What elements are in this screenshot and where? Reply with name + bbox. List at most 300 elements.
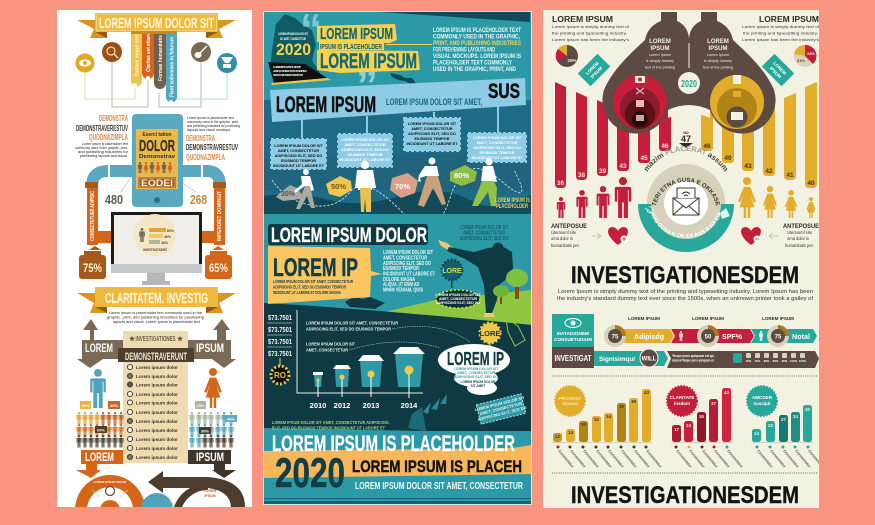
- header yellow title: [317, 24, 432, 73]
- badge: amcoer: [747, 386, 777, 416]
- row labels: LOREM IPSUM: [628, 316, 660, 321]
- heart plus: [608, 227, 628, 245]
- yellow bar labels: [703, 143, 815, 187]
- vertical tabs: Formas humanitatis: [158, 35, 164, 81]
- binocular label right: Lorem Ipsum: [707, 53, 729, 57]
- right anteposue text: humanitatis per: [785, 243, 813, 248]
- binoculars: [602, 12, 776, 134]
- binocular label right: text of the printing: [703, 66, 733, 70]
- pie chart left: [556, 45, 578, 67]
- header paragraph: USED IN THE GRAPHIC, PRINT, AND: [433, 66, 516, 73]
- right column and pointing hand: IMPERDIET DOMINGIT: [217, 191, 223, 241]
- text block: left headings: previewing layouts and visual.: [80, 154, 128, 158]
- text block: right headings: and publishing industries for previewing: [187, 124, 240, 128]
- white paragraph: ADIPISCING ELIT, SED DO: [383, 261, 431, 267]
- arrow left: [592, 233, 601, 239]
- white paragraph: ALIQUA, UT ENIM AD: [383, 282, 419, 288]
- callout bubble 3: LOREM IPSUM DOLOR SIT: [408, 122, 457, 126]
- right anteposue text: [783, 224, 819, 248]
- banner: lorem ipsum sus: SUS: [488, 80, 520, 103]
- figure: 70% walker: 70%: [395, 184, 411, 191]
- red bar labels: 45: [640, 155, 648, 162]
- bar chart: yellow: 12: [555, 434, 560, 439]
- arrow band one: 50: [705, 334, 712, 340]
- text block: left headings: and publishing industries for: [78, 150, 129, 154]
- teal top-right text: ADIPISCING ELIT, SED DO: [460, 236, 509, 242]
- bar chart: yellow: 43: [644, 390, 649, 395]
- black burst callout: AMET, CONSECTETUR: [439, 297, 478, 301]
- header 2020 blob: LOREM IPSUM DOLOR SIT: [273, 65, 301, 69]
- right heading text: [742, 15, 820, 42]
- yellow people row: [738, 177, 816, 218]
- right anteposue text: orna dolor in: [787, 236, 809, 241]
- bar chart: red: 37: [711, 401, 716, 406]
- stat 268: 268: [190, 192, 207, 207]
- people grid: left: [76, 401, 124, 448]
- right brown arrows with IPSUM: [188, 319, 236, 368]
- yellow bar labels: 43: [744, 163, 752, 170]
- text block: left headings: Lorem Ipsum is placeholder text: [82, 142, 128, 146]
- white paragraph: EIUSMOD TEMPOR: [383, 266, 419, 272]
- dark blue walking scene background: [263, 100, 532, 214]
- brown curved arrow wheel: IPSUM: [204, 494, 216, 498]
- chart y labels: [267, 313, 292, 358]
- phone: Exerci tation: [142, 132, 172, 138]
- badge: 75%: 75%: [83, 261, 102, 275]
- blue half circle: [141, 493, 173, 507]
- bar chart: red: 17: [674, 427, 679, 432]
- text block: right headings: commonly used in the graphic, print,: [187, 120, 239, 124]
- panel: beige checklist: [118, 331, 194, 463]
- red bar labels: 39: [599, 168, 606, 175]
- orange wheel: [75, 475, 145, 510]
- header paragraph: LOREM IPSUM IS PLACEHOLDER TEXT: [433, 27, 521, 34]
- banner caption: graphic, print, and publishing industries for previewing: [107, 316, 204, 320]
- arrow band two: 60%: [764, 359, 770, 363]
- dark IPSUM label arrow: IPSUM: [196, 450, 224, 464]
- vertical tabs: Fiant sollemnes in futurum: [170, 37, 176, 97]
- bar chart: yellow: 30: [619, 404, 624, 409]
- right heading text: Lorem Ipsum is simply dummy text of: [742, 25, 820, 29]
- rotated axis labels: [557, 449, 825, 469]
- red people row: [557, 177, 631, 218]
- teal info block: [552, 314, 594, 347]
- callout bubble 1: ADIPISCING ELIT, SED DO: [275, 154, 322, 158]
- 2020 circle: 2020: [681, 79, 697, 90]
- light band backdrop: [263, 150, 532, 190]
- pie chart right: [794, 45, 816, 67]
- cloud: lorem ip: SIT AMET: [471, 384, 485, 388]
- brown curved arrow wheel: [148, 471, 245, 507]
- people grid: left: 40%: [110, 403, 118, 408]
- LORE yellow burst: LORE: [480, 329, 500, 338]
- red bar labels: [557, 143, 669, 187]
- badge: claritate: CLARITATE: [670, 395, 694, 400]
- cup chart: 2013: [358, 355, 384, 410]
- cup chart: 2013: 2013: [363, 401, 379, 410]
- red bar labels: 38: [578, 172, 585, 179]
- stat 480: 480: [105, 192, 123, 207]
- black burst callout: [436, 290, 481, 308]
- panel: beige checklist: Lorem ipsum dolor: [136, 374, 178, 379]
- callout bubble 3: ADIPISCING ELIT, SED DO: [408, 132, 456, 136]
- phone: Demonstrav: [139, 154, 175, 160]
- badge: process: dynami: [562, 401, 578, 406]
- badge: 65%: 65%: [209, 261, 228, 275]
- teal top-right text: LOREM IPSUM DOLOR SIT: [460, 225, 508, 231]
- yellow speech box: INCIDIDUNT UT LABORE ET DOLORE MAGNA: [273, 290, 341, 295]
- rotated axis labels: Consectetur: [701, 449, 719, 469]
- chevrons: [423, 394, 447, 414]
- orange LOREM label arrow: [76, 450, 123, 478]
- rotated axis labels: Consectetur: [633, 449, 651, 469]
- header 2020 blob: SIT AMET, CONSECTETUR: [280, 37, 306, 41]
- arrow band two: 40%: [755, 359, 761, 363]
- black burst callout: LOREM IPSUM DOLOR SIT: [436, 293, 481, 297]
- cup chart: 2010: 2010: [310, 401, 326, 410]
- banner caption: Lorem Ipsum is placeholder text commonly used in the: [109, 311, 202, 315]
- icon: orange woman: [204, 368, 222, 408]
- stat 268: [178, 180, 207, 207]
- arrow band two: *Neque porro quisquam est qui: [672, 354, 714, 358]
- chart captions: LOREM IPSUM DOLOR SIT: [306, 342, 355, 346]
- arrow band one: [604, 325, 817, 347]
- chart y labels: $73.7501: [268, 313, 292, 322]
- cloud: lorem ip: ADIPISCING ELIT, SED DO: [454, 375, 498, 379]
- teal chevron large: [408, 407, 426, 431]
- rotated axis labels: Consectetur: [620, 449, 638, 469]
- arrow band two: 100%: [790, 359, 798, 363]
- figure: 80% walker: [450, 158, 497, 206]
- vertical tabs: [131, 31, 177, 104]
- figure: 50% walker: 50%: [331, 184, 347, 191]
- text block: left headings: commonly used in the graphic, print,: [75, 146, 128, 150]
- icon: guitar circle: [191, 42, 211, 62]
- left heading text: [552, 15, 630, 42]
- curved heading: mazim PLACERAT assum: [644, 146, 728, 172]
- badge: process: PROCESS: [559, 396, 581, 401]
- chart captions: AMET, CONSECTETUR: [306, 348, 349, 352]
- red bar labels: 46: [661, 143, 669, 150]
- panel: beige checklist: Lorem ipsum dolor: [136, 446, 178, 451]
- arrow band two: dolorem*Neque porro quisquam es: [672, 358, 714, 362]
- small yellow caption: PLACEHOLDER: [496, 204, 528, 210]
- binocular label left: is simply dummy: [646, 59, 674, 63]
- arrow band two: [594, 349, 819, 368]
- arrow band one: Notal: [792, 334, 810, 341]
- rotated axis labels: Consectetur: [782, 449, 800, 469]
- cloud: lorem ip: LOREM IPSUM DOLOR: [461, 380, 496, 384]
- panel: beige checklist: Lorem ipsum dolor: [136, 419, 178, 424]
- white paragraph: INCIDIDUNT UT LABORE ET: [383, 272, 436, 278]
- heart minus: [741, 227, 761, 245]
- bar chart: red: 30: [699, 414, 704, 419]
- rotated axis labels: Consectetur: [756, 449, 774, 469]
- red bar labels: 43: [619, 163, 627, 170]
- panel: beige checklist: Lorem ipsum dolor: [136, 410, 178, 415]
- right anteposue text: Uterarumf site: [787, 230, 812, 235]
- left column and pointing hand: CONSECTETUER ADIPISIC: [90, 191, 96, 241]
- teal half ring: [638, 204, 734, 252]
- people grid: left: 60%: [97, 428, 105, 432]
- pie chart left: 25%: [567, 58, 577, 63]
- callout bubble 3: INCIDIDUNT UT LABORE ET: [406, 142, 458, 146]
- stat 480: [105, 168, 137, 207]
- header paragraph: COMMONLY USED IN THE GRAPHIC,: [433, 34, 520, 40]
- bar chart: teal: 14: [754, 431, 759, 436]
- LORE badge dark: [442, 260, 462, 288]
- top ribbon banner: [77, 13, 236, 38]
- header paragraph: VISUAL MOCKUPS. LOREM IPSUM IS: [433, 53, 522, 60]
- yellow bar labels: 46: [703, 143, 711, 150]
- bar chart: red: [671, 388, 732, 443]
- lime caption: LOREM IPSUM DOLOR SIT AMET, CONSECTETUR ADIPISCING: [272, 420, 389, 425]
- chart captions: LOREM IPSUM DOLOR SIT AMET, CONSECTETUR: [306, 320, 399, 326]
- 2020 circle: [678, 72, 700, 94]
- black burst callout: ADIPISCING ELIT, SED DO: [436, 301, 480, 305]
- right column and pointing hand: [202, 182, 226, 245]
- cup chart: 2010: [310, 372, 326, 410]
- footer stripes: [263, 498, 532, 505]
- phone: EODEI: [141, 178, 173, 189]
- cup chart: 2012: 2012: [334, 401, 350, 410]
- binocular label left: IPSUM: [650, 46, 670, 52]
- teal stamp callout: [474, 393, 529, 425]
- RO burst: RO: [274, 371, 286, 380]
- binocular label right: [703, 39, 733, 70]
- teal stamp callout: ADIPISCING ELIT, SED DO: [477, 405, 527, 422]
- vertical tabs: Notare sequi erat: [134, 34, 140, 76]
- lime caption: ELIT, SED DO EIUSMOD TEMPOR INCIDIDUNT UT LABORE ET: [272, 426, 385, 430]
- cloud: lorem ip: AMET, CONSECTETUR: [457, 371, 496, 375]
- people grid: right: 30%: [201, 428, 209, 434]
- teal ribbon tag right: IPSUM: [769, 66, 783, 79]
- text block: right headings: DEMONSTRAVRESTUV: [186, 143, 238, 152]
- small yellow caption: LOREM IPSUM IS: [495, 198, 530, 204]
- arrow band two: WILL: [642, 356, 657, 362]
- lime caption: [272, 420, 389, 430]
- chart captions: [306, 320, 470, 352]
- left heading text: LOREM IPSUM: [552, 15, 613, 24]
- title: investigationesdem: INVESTIGATIONESDEM: [571, 262, 799, 289]
- figure: 80% walker: 80%: [454, 173, 470, 180]
- callout bubble 3: [404, 118, 460, 151]
- number 47 marker: [679, 131, 693, 148]
- icon: graduate circle: [217, 53, 237, 73]
- cup chart: 2012: [333, 365, 351, 410]
- number 47 marker: NO: [683, 131, 689, 135]
- arrow band one: Adipisdg: [634, 334, 664, 341]
- chart y labels: $73.7501: [268, 349, 292, 358]
- people grid: right: 20%: [196, 403, 205, 408]
- title 2020: 2020: [275, 449, 345, 496]
- teal ribbon tag left: IPSUM: [590, 65, 603, 79]
- rotated axis labels: Consectetur: [794, 449, 812, 469]
- people grid: left: 30%: [81, 403, 90, 408]
- rotated axis labels: Consectetur: [582, 449, 600, 469]
- arrow band one: 75: [612, 334, 619, 340]
- arrow band one: SPF%: [722, 334, 743, 341]
- bubble connectors: [301, 106, 499, 138]
- top dark wedge: [380, 12, 530, 22]
- heading: lorem ipsum dolor: [268, 224, 428, 247]
- callout bubble 2: EIUSMOD TEMPOR: [347, 153, 383, 157]
- badge: amcoer: suscipit: [753, 401, 771, 406]
- left anteposue text: humanitatis per: [551, 243, 579, 248]
- intro text: [557, 289, 814, 302]
- text block: right headings: QUODNAZIMPLA: [186, 153, 225, 162]
- figure: 30% walker: 30%: [281, 191, 296, 198]
- header 2020 blob: SED DO EIUSMOD TEMPOR: [273, 73, 304, 77]
- footer title: investigationesdem: INVESTIGATIONESDEM: [571, 482, 799, 509]
- banner: lorem ipsum sus: LOREM IPSUM DOLOR SIT AMET,: [386, 97, 482, 108]
- hills: [263, 191, 532, 214]
- lower white line: LOREM IPSUM DOLOR SIT AMET, CONSECTETUR: [355, 481, 524, 492]
- bar chart: yellow: 34: [606, 414, 611, 419]
- header 2020 blob: LOREM IPSUM DOLOR SIT: [278, 32, 309, 36]
- rotated axis labels: Consectetur: [557, 449, 575, 469]
- arrow band two: 20%: [746, 359, 752, 363]
- binocular label right: LOREM: [707, 39, 729, 45]
- bar chart: teal: 22: [768, 423, 773, 428]
- white paragraph: MINIM VENIAM, QUIS: [383, 288, 423, 294]
- chart captions: ADIPISCING ELIT, SED DO EIUSMOD TEMPOR: [306, 326, 392, 332]
- callout bubble 2: AMET, CONSECTETUR: [344, 143, 386, 147]
- yellow speech box: ADIPISCING ELIT, SED DO EIUSMOD TEMPOR: [273, 284, 346, 290]
- panel: beige checklist: ★: [177, 335, 184, 343]
- panel: beige checklist: Lorem ipsum dolor: [136, 455, 178, 460]
- header paragraph: FOR PREVIEWING LAYOUTS AND: [433, 46, 495, 54]
- panel: beige checklist: DEMONSTRAVERUNT: [125, 351, 187, 363]
- panel: left infographic: [57, 10, 252, 525]
- binocular label right: is simply dummy: [704, 59, 732, 63]
- rotated axis labels: Consectetur: [569, 449, 587, 469]
- left anteposue text: [551, 224, 587, 248]
- left heading text: the printing and typesetting industry.: [552, 32, 627, 36]
- callout bubble 2: ADIPISCING ELIT, SED DO: [341, 148, 389, 152]
- center circular badge: [647, 164, 725, 239]
- banner: lorem ipsum sus: [270, 78, 526, 122]
- callout bubble 4: ADIPISCING ELIT, SED DO: [473, 146, 521, 150]
- yellow speech box: LOREM IPSUM DOLOR SIT AMET, CONSECTETUR: [273, 279, 353, 284]
- arrow band one: 75: [775, 334, 782, 340]
- cloud: lorem ip: [438, 344, 510, 395]
- badge: claritate: insdom: [674, 401, 690, 406]
- left brown arrows with LOREM: [77, 319, 124, 368]
- monitor: 40%: [164, 235, 172, 239]
- bar chart: teal: [751, 405, 813, 443]
- figure: 70% walker: [390, 158, 446, 207]
- callout bubble 4: [468, 133, 526, 162]
- teal stamp callout: AMET, CONSECTETUR: [479, 401, 523, 416]
- badge: 65%: [205, 246, 232, 279]
- header yellow title: IPSUM IS PLACEHOLDER: [320, 42, 382, 51]
- left column and pointing hand: [85, 182, 111, 245]
- dashed walking path: [272, 168, 522, 225]
- rotated axis labels: Consectetur: [645, 449, 663, 469]
- trees: [493, 269, 528, 304]
- right heading text: the printing and typesetting industry.: [743, 32, 818, 36]
- callout bubble 3: AMET, CONSECTETUR: [411, 127, 453, 131]
- second ribbon banner: [77, 287, 236, 313]
- dark IPSUM label arrow: [188, 450, 236, 478]
- section band teal: [263, 214, 532, 309]
- red bars: [555, 82, 671, 188]
- white paragraph: DOLORE MAGNA: [383, 277, 415, 283]
- binocular label left: LOREM: [649, 39, 671, 45]
- intro text: the industry's standard dummy text ever since the 1500s, when an unknown printer took a galley of: [557, 296, 814, 302]
- header yellow title: LOREM IPSUM: [320, 26, 393, 43]
- brown info block: INVESTIGAT: [554, 354, 592, 363]
- small yellow caption: [495, 198, 530, 210]
- rotated axis labels: Consectetur: [713, 449, 731, 469]
- teal top-right text: [460, 225, 509, 242]
- top ribbon banner: LOREM IPSUM DOLOR SIT: [99, 15, 214, 32]
- bar chart: yellow: 32: [594, 417, 599, 422]
- orange band: [263, 445, 532, 478]
- right anteposue text: ANTEPOSUE: [783, 224, 819, 230]
- bar chart: yellow: [552, 389, 652, 443]
- bar chart: red: 43: [724, 390, 729, 395]
- green leaf outline: [506, 318, 525, 346]
- connector lines: [85, 62, 227, 107]
- callout bubble 3: EIUSMOD TEMPOR: [414, 137, 450, 141]
- callout bubble 2: INCIDIDUNT UT LABORE ET: [339, 158, 391, 162]
- bar chart: teal: 27: [781, 417, 786, 422]
- panel outline middle: [264, 12, 532, 504]
- karate kick silhouette: [438, 240, 513, 317]
- rotated axis labels: Consectetur: [688, 449, 706, 469]
- red bar labels: 36: [557, 180, 564, 187]
- yellow bar labels: 41: [786, 172, 794, 179]
- callout bubble 4: EIUSMOD TEMPOR: [479, 151, 515, 155]
- panel: beige checklist: ★: [129, 335, 136, 343]
- text block: right headings: DEMONSTRA: [186, 134, 215, 143]
- right heading text: Lorem Ipsum has been the industry's: [742, 38, 819, 42]
- text block: right headings: [186, 116, 240, 162]
- brown info block: [552, 347, 594, 368]
- callout bubble 4: INCIDIDUNT UT LABORE ET: [471, 156, 523, 160]
- rotated axis labels: Consectetur: [675, 449, 693, 469]
- dark chart background: [263, 303, 532, 433]
- pipes: [92, 165, 220, 186]
- RO burst: [271, 358, 289, 384]
- yellow bars: [701, 82, 817, 188]
- white paragraph: [383, 250, 436, 294]
- yellow bar labels: 40: [724, 155, 732, 162]
- vertical tabs: Claritas est etiam: [146, 34, 152, 72]
- left anteposue text: ANTEPOSUE: [551, 224, 587, 230]
- yellow speech box: LOREM IP: [273, 254, 358, 282]
- callout bubble 2: LOREM IPSUM DOLOR SIT: [341, 138, 390, 142]
- green ground: [380, 290, 532, 325]
- monitor: 30%: [161, 241, 169, 245]
- text block: left headings: DEMONSTRAVERESTUV: [76, 124, 128, 133]
- binocular label left: Lorem Ipsum: [649, 53, 671, 57]
- chevron arrow: [390, 73, 421, 90]
- row labels: LOREM IPSUM: [762, 316, 794, 321]
- panel: beige checklist: Lorem ipsum dolor: [136, 437, 178, 442]
- teal half ring: AUG GUSA K OK EA ANS B NA EIA: [650, 212, 720, 238]
- badge: claritate: [667, 386, 697, 416]
- text block: right headings: Lorem Ipsum is placeholder text: [187, 116, 234, 120]
- monitor: [111, 212, 202, 285]
- bar chart: teal: 34: [793, 414, 798, 419]
- heading: lorem ipsum dolor: LOREM IPSUM DOLOR: [271, 224, 427, 247]
- teal ribbon tag right: LOREM: [772, 61, 787, 76]
- left brown arrows with LOREM: LOREM: [85, 341, 113, 355]
- panel: beige checklist: INVESTIGATIONES: [136, 336, 176, 343]
